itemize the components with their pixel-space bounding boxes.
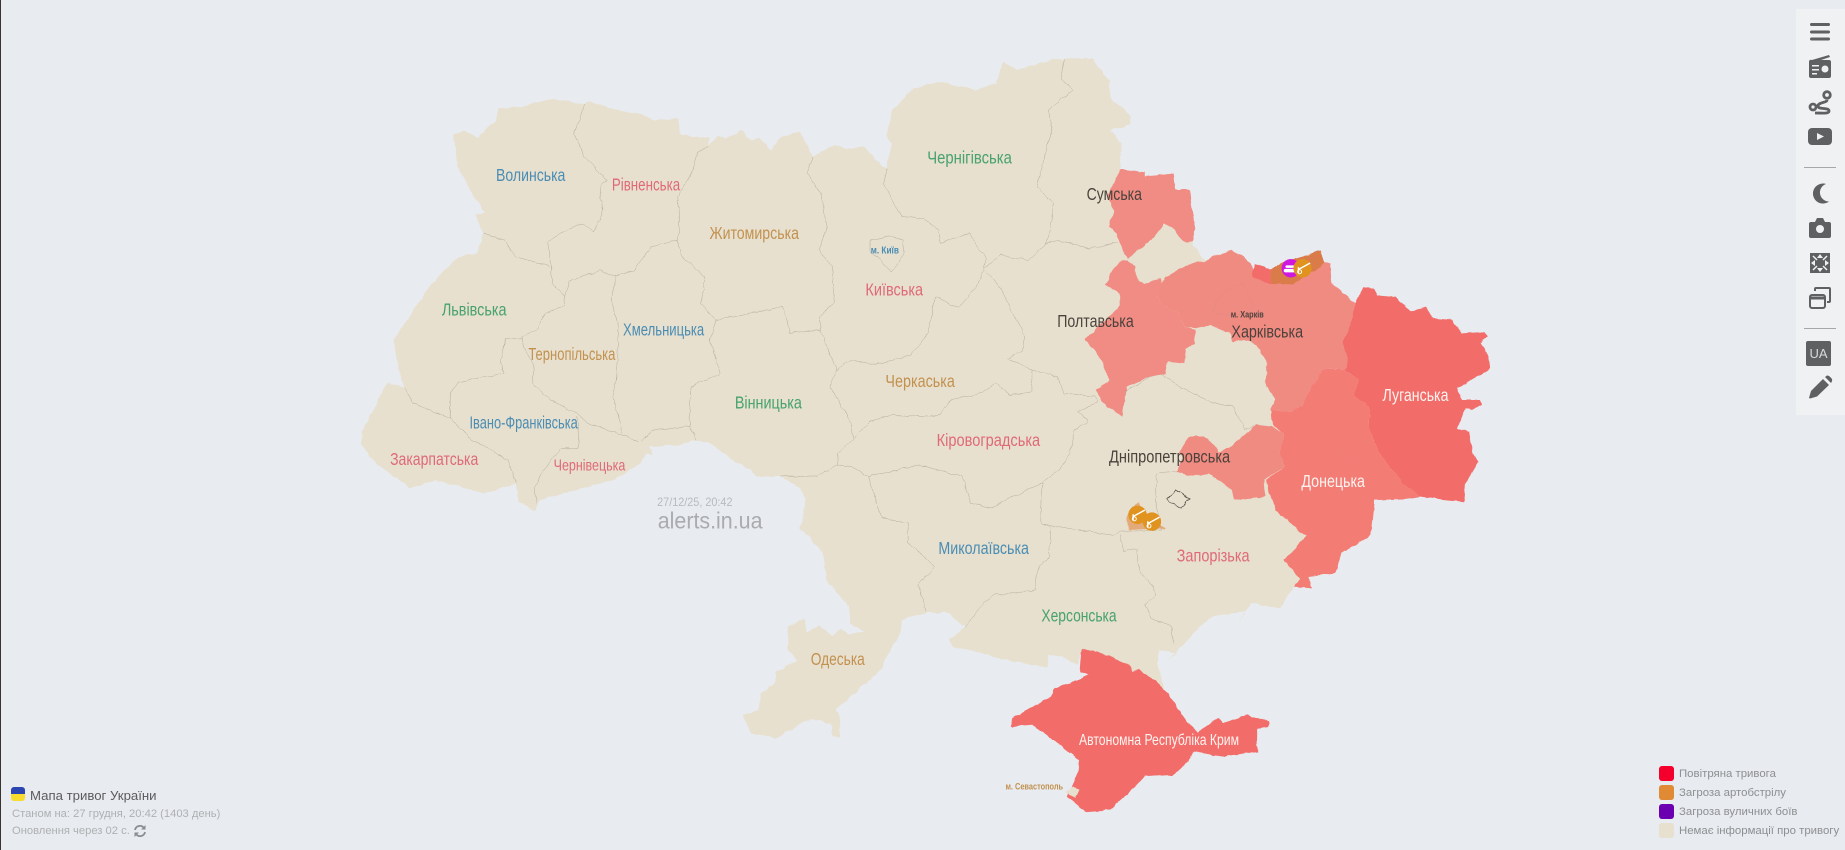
label: Кіровоградська: Кіровоградська	[937, 430, 1040, 450]
icon: artillery threat Дніпропетровська 1	[1128, 506, 1147, 524]
region: Харківська alert area	[1157, 250, 1355, 412]
language button UA: UA	[1809, 346, 1828, 361]
icon: artillery threat Дніпропетровська 2	[1143, 512, 1161, 531]
label: Чернігівська: Чернігівська	[927, 148, 1012, 168]
label: Київська: Київська	[865, 279, 923, 299]
legend swatch: street fighting	[1659, 804, 1674, 819]
label: Житомирська: Житомирська	[710, 223, 799, 243]
land: no-alert regions	[361, 58, 1420, 738]
label: Донецька: Донецька	[1301, 471, 1365, 491]
label: Рівненська: Рівненська	[612, 175, 680, 195]
legend text: street fighting: Загроза вуличних боїв	[1679, 806, 1797, 818]
divider	[1804, 167, 1836, 168]
label: Одеська: Одеська	[811, 649, 865, 669]
icon: artillery threat Харків	[1293, 259, 1312, 277]
label: Херсонська: Херсонська	[1041, 605, 1117, 625]
toolbar panel	[1796, 9, 1845, 415]
icon: radio	[1809, 55, 1831, 78]
label: Полтавська: Полтавська	[1057, 311, 1134, 331]
region: Харків artillery threat patch	[1271, 250, 1324, 285]
region: Запорізька and Дніпропетровська alert area	[1177, 425, 1285, 500]
label: Луганська: Луганська	[1383, 385, 1449, 405]
icon: refresh	[134, 825, 146, 837]
icon: street-fighting threat (tank)	[1282, 259, 1300, 277]
icon: route	[1810, 92, 1830, 113]
region borders	[405, 58, 1365, 643]
map shapes	[361, 58, 1491, 812]
legend swatch: no info	[1659, 823, 1674, 838]
label: Автономна Республіка Крим: Автономна Республіка Крим	[1079, 732, 1239, 749]
update countdown: Оновлення через 02 с.	[12, 825, 130, 837]
region: Автономна Республіка Крим	[1010, 648, 1269, 812]
legend swatch: artillery	[1659, 785, 1674, 800]
icon: Ukrainian flag	[11, 787, 25, 801]
label: Закарпатська: Закарпатська	[390, 449, 478, 469]
label: м. Київ: м. Київ	[871, 246, 899, 257]
icon: pen	[1809, 375, 1832, 398]
label: м. Севастополь: м. Севастополь	[1005, 782, 1064, 792]
label: Харківська: Харківська	[1231, 322, 1303, 342]
region: м. Севастополь	[1066, 786, 1080, 798]
label: Хмельницька: Хмельницька	[623, 319, 704, 339]
label: Чернівецька: Чернівецька	[554, 458, 626, 475]
divider	[1804, 328, 1836, 329]
legend swatch: air alert	[1659, 766, 1674, 781]
watermark date: 27/12/25, 20:42	[657, 496, 732, 509]
label: Дніпропетровська: Дніпропетровська	[1109, 446, 1230, 466]
icon: windows	[1810, 288, 1830, 308]
region: Харків frontline alert patch	[1252, 264, 1271, 283]
label: Сумська: Сумська	[1087, 184, 1142, 204]
label: Тернопільська: Тернопільська	[528, 344, 616, 364]
label: Вінницька: Вінницька	[735, 392, 802, 412]
region: Полтавська alert area	[1085, 260, 1195, 417]
status date: Станом на: 27 грудня, 20:42 (1403 день)	[12, 808, 220, 820]
icon: moon	[1813, 184, 1829, 204]
watermark site name: alerts.in.ua	[658, 507, 763, 533]
label: Миколаївська: Миколаївська	[938, 538, 1029, 558]
icon: menu	[1810, 23, 1830, 40]
label: Запорізька: Запорізька	[1177, 545, 1250, 565]
legend text: artillery: Загроза артобстрілу	[1679, 787, 1786, 799]
heading: map title: Мапа тривог України	[30, 788, 157, 803]
region: Луганська	[1343, 287, 1491, 502]
icon: fullscreen	[1810, 253, 1830, 273]
language button UA	[1806, 341, 1831, 366]
info block	[11, 787, 220, 837]
region: Дніпропетровська artillery threat patch	[1127, 502, 1165, 530]
region: Донецька	[1265, 368, 1420, 588]
legend	[1659, 766, 1840, 838]
label: Волинська: Волинська	[496, 165, 566, 185]
icon: camera	[1809, 218, 1831, 238]
legend text: air alert: Повітряна тривога	[1679, 768, 1776, 780]
label: м. Харків: м. Харків	[1231, 310, 1264, 320]
legend text: no info: Немає інформації про тривогу	[1679, 825, 1839, 837]
icon: video	[1808, 128, 1832, 145]
region: Сумська alert area	[1107, 170, 1195, 258]
label: Івано-Франківська: Івано-Франківська	[469, 412, 578, 432]
label: Черкаська: Черкаська	[885, 371, 955, 391]
label: Львівська: Львівська	[442, 299, 507, 319]
